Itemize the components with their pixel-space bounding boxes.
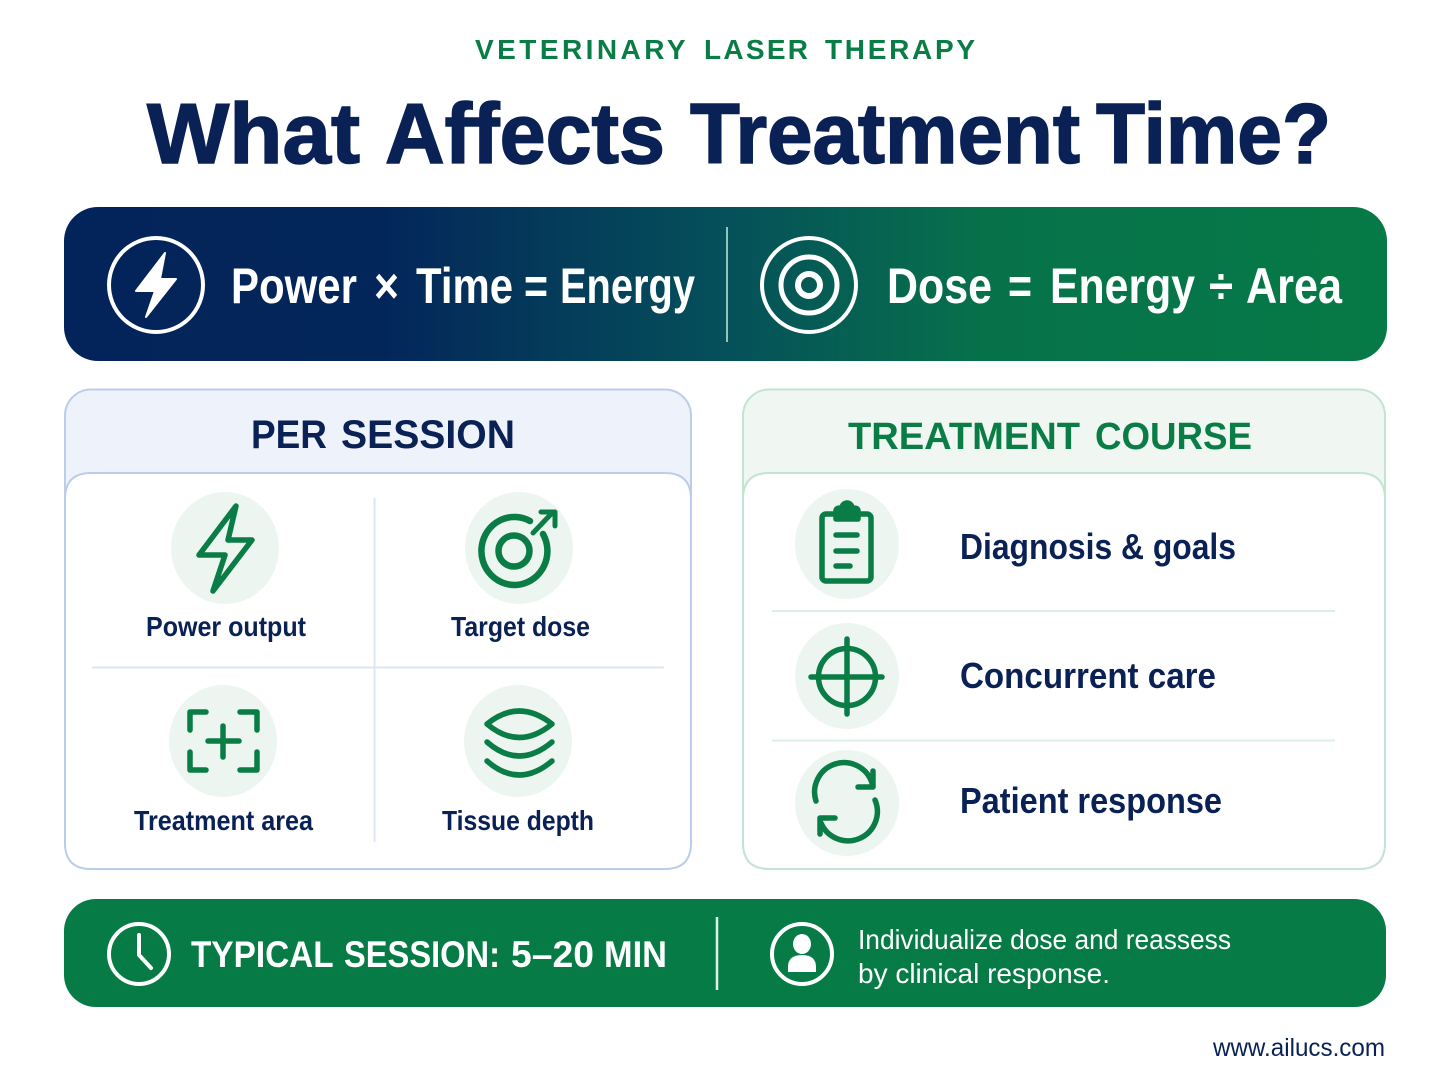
advice text: by clinical response. <box>858 958 1110 989</box>
item: diagnosis and goals <box>795 489 1236 599</box>
label: target dose: Target dose <box>451 611 590 642</box>
label: diagnosis and goals: Diagnosis & goals <box>960 526 1236 567</box>
formula: dose energy area: = <box>1008 258 1032 314</box>
eyebrow heading: VETERINARY <box>475 34 686 65</box>
icon: bolt outline <box>199 506 252 591</box>
icon: lightning bolt in circle <box>109 238 203 332</box>
icon: refresh arrows <box>815 763 877 841</box>
item: concurrent care <box>795 623 1216 729</box>
icon: clock <box>109 924 169 984</box>
icon: target with arrow <box>481 512 555 585</box>
title: Treatment <box>690 87 1080 182</box>
typical session text: 5–20 <box>511 934 594 975</box>
heading: treatment course: COURSE <box>1095 416 1252 458</box>
bottom banner <box>64 899 1386 1007</box>
panel: treatment course <box>743 390 1385 869</box>
label: treatment area: Treatment area <box>134 805 313 836</box>
item: patient response <box>795 750 1222 856</box>
label: power output: Power output <box>146 611 306 642</box>
formula banner <box>64 207 1387 361</box>
icon: tissue layers <box>487 711 552 775</box>
title: Affects <box>385 87 665 182</box>
formula: power time energy: Power <box>231 258 357 314</box>
icon: crosshair <box>811 639 882 714</box>
formula: dose energy area: Energy <box>1050 258 1195 314</box>
label: concurrent care: Concurrent care <box>960 655 1216 696</box>
item: power output <box>146 492 306 642</box>
formula: power time energy: = <box>524 258 548 314</box>
formula: power time energy: Energy <box>560 258 695 314</box>
formula: dose energy area: ÷ <box>1209 258 1233 314</box>
typical session text: MIN <box>604 934 667 975</box>
formula: dose energy area: Dose <box>887 258 992 314</box>
typical session text: SESSION: <box>344 934 500 975</box>
icon: area brackets with plus <box>190 712 257 770</box>
icon: concentric target <box>762 238 856 332</box>
eyebrow heading: LASER <box>704 34 808 65</box>
panel: per session <box>65 390 691 869</box>
advice text <box>858 924 1231 989</box>
item: tissue depth <box>442 685 594 836</box>
advice text: Individualize dose and reassess <box>858 924 1231 955</box>
formula: power time energy: Time <box>416 258 513 314</box>
heading: per session: SESSION <box>341 413 515 457</box>
formula: power time energy: × <box>374 258 399 314</box>
heading: treatment course: TREATMENT <box>848 416 1080 458</box>
icon: person <box>772 924 832 984</box>
eyebrow heading: THERAPY <box>825 34 975 65</box>
formula: dose energy area: Area <box>1246 258 1343 314</box>
title: What <box>147 87 360 182</box>
icon: clipboard <box>822 503 871 581</box>
item: target dose <box>451 492 590 642</box>
item: treatment area <box>134 685 313 836</box>
heading: per session: PER <box>251 413 327 457</box>
label: patient response: Patient response <box>960 780 1222 821</box>
typical session text: TYPICAL <box>191 934 333 975</box>
website footer: www.ailucs.com <box>1212 1034 1385 1062</box>
title: Time? <box>1096 87 1331 182</box>
label: tissue depth: Tissue depth <box>442 805 594 836</box>
